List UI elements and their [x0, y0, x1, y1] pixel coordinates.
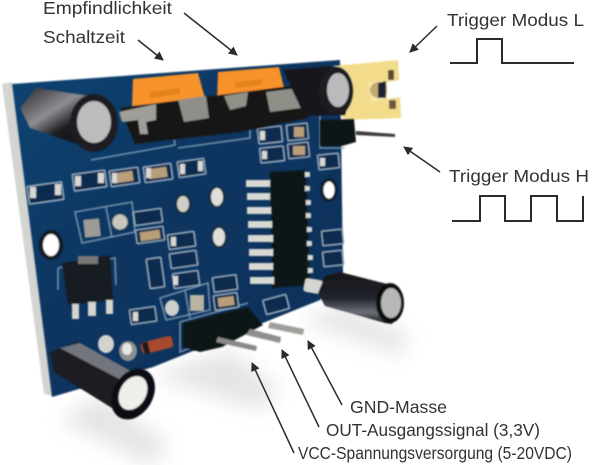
pin header: trigger mode — [320, 119, 395, 146]
label: Trigger Modus H: Trigger Modus H — [449, 166, 589, 186]
capacitor: top left — [20, 88, 118, 152]
capacitor: right — [303, 272, 404, 324]
orange dial left — [132, 73, 205, 106]
arrow: Trigger Modus L — [410, 26, 437, 52]
arrow: Schaltzeit — [138, 40, 163, 60]
circuit board — [12, 60, 343, 397]
label: OUT: OUT-Ausgangssignal (3,3V) — [326, 420, 540, 440]
board side edge — [2, 82, 53, 396]
arrow: VCC — [252, 363, 294, 453]
trimmer potentiometers — [119, 67, 308, 144]
white silkscreen outlines — [58, 115, 345, 352]
arrow: Trigger Modus H — [404, 147, 440, 172]
LED and diode — [98, 335, 174, 361]
label: Trigger Modus L: Trigger Modus L — [447, 10, 584, 30]
capacitor: bottom left — [50, 342, 164, 427]
label: VCC: VCC-Spannungsversorgung (5-20VDC) — [298, 443, 572, 463]
IC chip — [246, 170, 313, 288]
black body — [120, 84, 308, 144]
sensor module photo — [2, 60, 404, 427]
arrow: OUT — [282, 350, 319, 427]
solder pads and mounting holes — [41, 180, 336, 316]
shadows under the module — [60, 305, 410, 465]
arrow: Empfindlichkeit — [184, 13, 237, 55]
label: GND: GND-Masse — [350, 397, 447, 417]
capacitor: top right — [283, 66, 353, 116]
waveform: Trigger Modus L — [450, 39, 574, 63]
label: Schaltzeit: Schaltzeit — [43, 27, 125, 47]
main pin header — [183, 307, 304, 352]
waveform: Trigger Modus H — [452, 196, 583, 221]
SMD resistors and capacitors — [27, 123, 344, 325]
jumper: yellow — [333, 60, 401, 120]
arrow: GND — [308, 341, 342, 405]
voltage regulator — [62, 255, 113, 319]
orange dial right — [217, 67, 285, 100]
